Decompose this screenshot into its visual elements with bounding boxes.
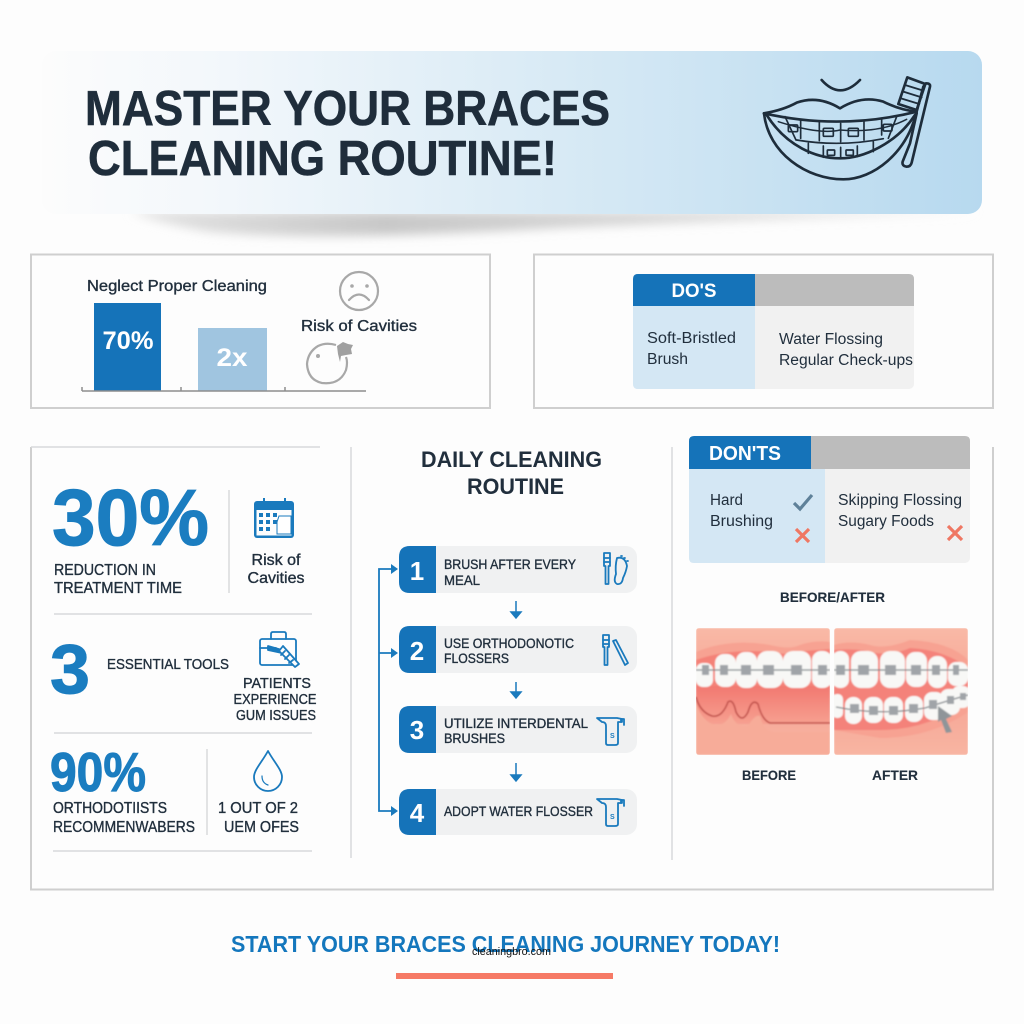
image: after xyxy=(832,628,970,755)
bar: 70%: 70% xyxy=(102,327,154,355)
label: patients experience gum issues: EXPERIENCE xyxy=(234,692,317,708)
stat: 30%: REDUCTION IN xyxy=(54,562,156,579)
label: risk of cavities: Cavities xyxy=(248,570,305,587)
icon: calendar xyxy=(254,498,294,538)
step 2: FLOSSERS xyxy=(444,651,509,666)
bar: 2x: 2x xyxy=(216,344,248,372)
panel: risk stats xyxy=(31,254,490,408)
call to action: START YOUR BRACES CLEANING JOURNEY TODAY! xyxy=(231,931,780,957)
icon: water flosser: S xyxy=(610,733,615,740)
label: risk of cavities xyxy=(248,552,305,587)
step 3: 3 xyxy=(410,715,424,745)
do's card xyxy=(633,274,914,389)
label: 1 out of 2 xyxy=(218,800,299,836)
label: patients experience gum issues xyxy=(234,676,317,724)
icon: check xyxy=(794,495,812,509)
stat: 3 essential tools: ESSENTIAL TOOLS xyxy=(107,657,229,673)
icon: water flosser: S xyxy=(610,814,615,821)
stat: 3 essential tools: 3 xyxy=(50,630,90,708)
stat: 90%: ORTHODOTIISTS xyxy=(53,800,167,817)
do's card: Brush xyxy=(647,351,688,368)
do's card: Soft-Bristled xyxy=(647,330,736,347)
step 3: BRUSHES xyxy=(444,731,505,746)
stat: 90%: RECOMMENWABERS xyxy=(53,819,195,836)
arrow: down xyxy=(511,763,521,781)
step 4 xyxy=(399,789,637,835)
accent bar xyxy=(396,973,613,979)
panel: don'ts: Sugary Foods xyxy=(838,513,934,530)
do's card: Water Flossing xyxy=(779,331,883,348)
step 1 xyxy=(399,546,637,593)
icon: red cross xyxy=(796,529,809,542)
step 2: USE ORTHODONOTIC xyxy=(444,636,574,651)
panel: key statistics xyxy=(50,473,317,851)
icon: toothbrush and flosser xyxy=(603,635,628,665)
label: patients experience gum issues: GUM ISSUES xyxy=(236,708,316,724)
routine heading xyxy=(421,447,602,499)
panel: daily cleaning routine xyxy=(379,447,637,835)
step 2 xyxy=(399,626,637,673)
icon: toothbrush and foot xyxy=(604,553,628,584)
arrow: down xyxy=(511,682,521,698)
step 4: 4 xyxy=(410,798,425,828)
icon: toolkit xyxy=(260,632,299,667)
icon: damaged tooth xyxy=(307,342,353,383)
panel: don'ts: Skipping Flossing xyxy=(838,492,962,509)
icon: red cross xyxy=(948,526,962,540)
label: patients experience gum issues: PATIENTS xyxy=(243,676,311,692)
step 1: 1 xyxy=(410,556,424,586)
stat: 90% xyxy=(50,741,195,836)
title: MASTER YOUR BRACES xyxy=(85,82,610,136)
panel: don'ts: Brushing xyxy=(710,513,773,530)
step 3: UTILIZE INTERDENTAL xyxy=(444,716,588,731)
icon: smile with braces and toothbrush xyxy=(764,77,930,179)
main panel frame xyxy=(31,447,993,890)
step 1: BRUSH AFTER EVERY xyxy=(444,557,576,572)
icon: water flosser xyxy=(597,718,624,745)
step 2: 2 xyxy=(410,636,424,666)
title xyxy=(85,82,610,186)
chart heading: Neglect Proper Cleaning xyxy=(87,278,267,295)
heading: before/after: BEFORE/AFTER xyxy=(780,589,885,605)
panel: do's frame xyxy=(534,254,993,408)
do's card: Regular Check-ups xyxy=(779,352,913,369)
bar: 2x xyxy=(198,328,267,391)
label: after: AFTER xyxy=(872,767,918,783)
stat: 90%: 90% xyxy=(50,741,146,803)
routine heading: ROUTINE xyxy=(467,474,564,499)
watermark: cleaningbro.com xyxy=(472,946,551,958)
step 1: MEAL xyxy=(444,573,480,588)
icon: sad face xyxy=(340,272,378,310)
routine heading: DAILY CLEANING xyxy=(421,447,602,472)
stat: 30%: 30% xyxy=(52,473,209,562)
icon: water drop xyxy=(254,751,282,791)
image: before xyxy=(696,628,832,755)
panel: don'ts: DON'TS xyxy=(709,443,781,465)
step 4: ADOPT WATER FLOSSER xyxy=(444,804,593,819)
panel: don'ts: Hard xyxy=(710,492,743,509)
label: 1 out of 2: UEM OFES xyxy=(224,819,299,836)
chart axis xyxy=(82,387,366,391)
do's card: DO'S xyxy=(672,281,716,302)
label: before: BEFORE xyxy=(742,767,796,783)
label: 1 out of 2: 1 OUT OF 2 xyxy=(218,800,298,817)
icon: water flosser xyxy=(597,799,624,826)
stat: 30%: TREATMENT TIME xyxy=(54,580,182,597)
panel: don'ts xyxy=(689,436,970,563)
stat: 3 essential tools xyxy=(50,630,229,708)
bar: 70% xyxy=(94,303,161,391)
header banner xyxy=(42,51,982,236)
arrow: down xyxy=(511,601,521,618)
title: CLEANING ROUTINE! xyxy=(88,132,557,186)
label: risk of cavities: Risk of xyxy=(252,552,301,569)
step 3 xyxy=(399,706,637,753)
arrow: loop connector xyxy=(379,564,398,816)
label: risk of cavities: Risk of Cavities xyxy=(301,318,417,335)
